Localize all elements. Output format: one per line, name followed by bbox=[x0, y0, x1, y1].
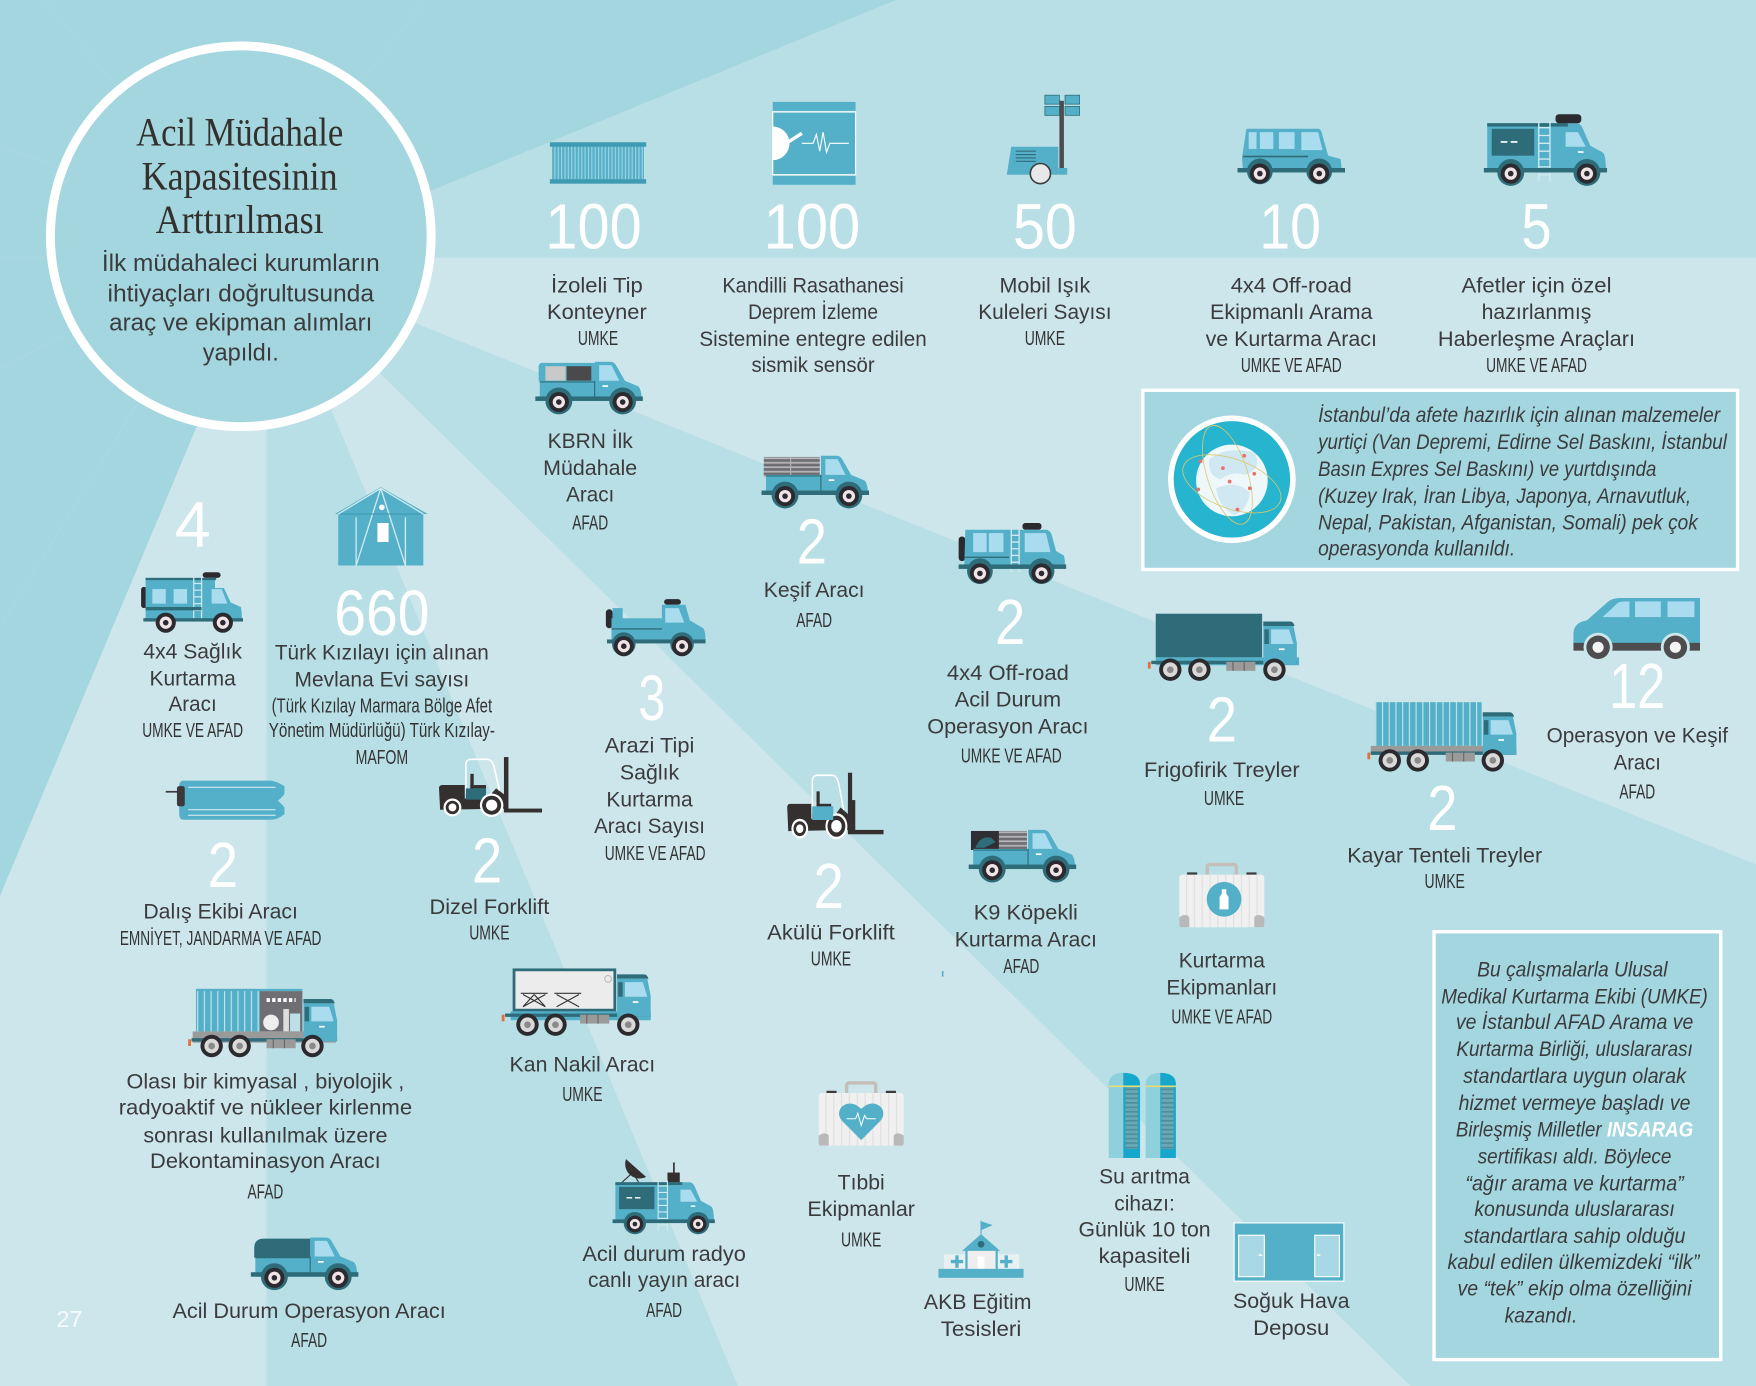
callout text: standartlara uygun olarak bbox=[1463, 1064, 1687, 1088]
number: 100 bbox=[764, 191, 860, 263]
label bbox=[1078, 1165, 1211, 1296]
label: AFAD bbox=[291, 1330, 327, 1352]
label: Aracı bbox=[169, 692, 217, 716]
label bbox=[543, 429, 637, 535]
icon: KBRN vehicle bbox=[535, 362, 643, 414]
number: 2 bbox=[472, 824, 502, 896]
heading: Kapasitesinin bbox=[142, 153, 338, 198]
icon: diesel forklift bbox=[439, 757, 542, 817]
number: 660 bbox=[334, 577, 429, 649]
label bbox=[924, 1290, 1031, 1341]
label bbox=[510, 1053, 655, 1106]
label bbox=[429, 895, 549, 945]
label: sonrası kullanılmak üzere bbox=[143, 1123, 387, 1147]
label: sismik sensör bbox=[751, 353, 875, 377]
label: Ekipmanlı Arama bbox=[1210, 300, 1373, 324]
label: Kurtarma bbox=[606, 787, 693, 811]
label: Soğuk Hava bbox=[1233, 1289, 1350, 1313]
label: ve Kurtarma Aracı bbox=[1206, 327, 1377, 351]
callout text: Birleşmiş Milletler INSARAG bbox=[1456, 1118, 1693, 1142]
item: kesif araci bbox=[762, 456, 869, 632]
label: UMKE VE AFAD bbox=[142, 720, 243, 742]
item: tibbi ekipmanlar bbox=[807, 1083, 915, 1251]
label: UMKE bbox=[1204, 788, 1244, 810]
label: UMKE VE AFAD bbox=[1486, 355, 1587, 377]
label bbox=[927, 661, 1089, 768]
label bbox=[547, 273, 647, 350]
icon: pickup with cage bbox=[762, 456, 869, 508]
label: canlı yayın aracı bbox=[588, 1268, 740, 1292]
label bbox=[978, 273, 1111, 350]
label: Arazi Tipi bbox=[605, 734, 694, 758]
label: K9 Köpekli bbox=[974, 900, 1078, 924]
label: Dizel Forklift bbox=[429, 895, 549, 919]
label bbox=[594, 734, 706, 865]
item: mobil isik kuleleri bbox=[978, 95, 1111, 350]
icon: off-road ambulance bbox=[606, 599, 706, 656]
label: Tıbbi bbox=[838, 1170, 885, 1194]
label: 4x4 Off-road bbox=[1231, 273, 1352, 297]
label: UMKE bbox=[811, 948, 851, 970]
label: Kurtarma Aracı bbox=[955, 927, 1097, 951]
icon: operation vehicle bbox=[251, 1237, 358, 1290]
label bbox=[582, 1242, 746, 1322]
label: 4x4 Sağlık bbox=[143, 640, 242, 664]
panel: title circle bbox=[50, 46, 431, 427]
callout text: (Kuzey Irak, İran Libya, Japonya, Arnavutluk, bbox=[1318, 484, 1691, 508]
icon: water purification units bbox=[1109, 1073, 1176, 1158]
label: Deprem İzleme bbox=[748, 300, 878, 324]
callout text bbox=[1316, 403, 1728, 560]
intro text bbox=[102, 250, 380, 367]
label: EMNİYET, JANDARMA VE AFAD bbox=[120, 927, 321, 950]
label: Dalış Ekibi Aracı bbox=[143, 899, 298, 923]
callout text: sertifikası aldı. Böylece bbox=[1478, 1145, 1672, 1169]
icon: light tower bbox=[1007, 95, 1080, 184]
callout text: İstanbul’da afete hazırlık için alınan malzemeler bbox=[1318, 403, 1721, 427]
intro text: yapıldı. bbox=[203, 340, 279, 367]
label bbox=[1166, 949, 1277, 1029]
intro text: İlk müdahaleci kurumların bbox=[102, 250, 380, 277]
label: Mobil Işık bbox=[1000, 273, 1091, 297]
callout text: kazandı. bbox=[1505, 1304, 1577, 1328]
label: AFAD bbox=[646, 1300, 682, 1322]
callout text: “ağır arama ve kurtarma” bbox=[1465, 1171, 1685, 1195]
label: hazırlanmış bbox=[1482, 300, 1591, 324]
callout text: kabul edilen ülkemizdeki “ilk” bbox=[1447, 1250, 1700, 1274]
label: Ekipmanları bbox=[1166, 975, 1277, 999]
label: radyoaktif ve nükleer kirlenme bbox=[119, 1095, 412, 1119]
decorative speck bbox=[942, 971, 944, 977]
label: İzoleli Tip bbox=[551, 273, 643, 297]
number: 2 bbox=[208, 829, 238, 901]
label: Aracı Sayısı bbox=[594, 814, 705, 838]
callout text: Kurtarma Birliği, uluslararası bbox=[1456, 1037, 1693, 1061]
callout text: ve İstanbul AFAD Arama ve bbox=[1456, 1010, 1693, 1034]
number: 100 bbox=[545, 191, 642, 263]
label: Frigofirik Treyler bbox=[1144, 758, 1300, 782]
label: Keşif Aracı bbox=[764, 578, 865, 602]
label: UMKE bbox=[578, 328, 618, 350]
icon: van bbox=[1573, 598, 1700, 662]
label: Acil Durum bbox=[955, 688, 1061, 712]
label: Acil durum radyo bbox=[582, 1242, 746, 1266]
label: Kan Nakil Aracı bbox=[510, 1053, 655, 1077]
label: cihazı: bbox=[1114, 1192, 1175, 1216]
label bbox=[142, 640, 243, 742]
item: sismik sensor bbox=[699, 102, 927, 377]
label: KBRN İlk bbox=[548, 429, 633, 453]
item: kan nakil araci bbox=[502, 970, 655, 1106]
item: operasyon ve kesif araci bbox=[1547, 598, 1728, 803]
number: 3 bbox=[638, 662, 665, 734]
label bbox=[764, 578, 865, 632]
icon: radio broadcast vehicle bbox=[613, 1159, 715, 1234]
intro text: ihtiyaçları doğrultusunda bbox=[108, 280, 375, 307]
label: Su arıtma bbox=[1099, 1165, 1190, 1189]
icon: seismograph bbox=[773, 102, 856, 185]
icon: 4x4 vehicle bbox=[959, 523, 1066, 584]
label: Sağlık bbox=[620, 760, 680, 784]
label bbox=[1233, 1289, 1350, 1340]
item: radyo canli yayin araci bbox=[582, 1159, 746, 1322]
label bbox=[1206, 273, 1377, 377]
heading: Acil Müdahale bbox=[136, 110, 343, 155]
number: 12 bbox=[1609, 650, 1665, 722]
label: Konteyner bbox=[547, 300, 647, 324]
label: Operasyon ve Keşif bbox=[1547, 723, 1728, 747]
label bbox=[699, 273, 927, 377]
number: 10 bbox=[1259, 191, 1321, 263]
label: Kurtarma bbox=[1179, 949, 1265, 973]
label: (Türk Kızılay Marmara Bölge Afet bbox=[272, 695, 492, 717]
label: Müdahale bbox=[543, 456, 637, 480]
label: AFAD bbox=[1619, 781, 1655, 803]
heading: Arttırılması bbox=[156, 197, 324, 242]
heading bbox=[136, 110, 343, 242]
label: Olası bir kimyasal , biyolojik , bbox=[127, 1070, 404, 1094]
intro text: araç ve ekipman alımları bbox=[109, 309, 372, 336]
callout text: konusunda uluslararası bbox=[1474, 1197, 1675, 1221]
icon: cold storage bbox=[1234, 1223, 1344, 1281]
callout text: standartlara sahip olduğu bbox=[1464, 1224, 1686, 1248]
label bbox=[955, 900, 1097, 978]
label: Aracı bbox=[566, 483, 614, 507]
callout text: Nepal, Pakistan, Afganistan, Somali) pek çok bbox=[1318, 511, 1699, 535]
item: dekontaminasyon araci bbox=[119, 989, 412, 1203]
label: Tesisleri bbox=[941, 1317, 1021, 1341]
icon: refrigerated truck bbox=[1148, 614, 1299, 681]
item: k9 kurtarma araci bbox=[955, 830, 1097, 978]
item: su aritma cihazi bbox=[1078, 1073, 1211, 1296]
callout text: Medikal Kurtarma Ekibi (UMKE) bbox=[1441, 984, 1708, 1008]
number: 2 bbox=[814, 850, 844, 922]
number: 2 bbox=[995, 586, 1025, 658]
icon: 4x4 ambulance bbox=[141, 572, 243, 633]
number: 2 bbox=[1207, 683, 1237, 755]
icon: electric forklift bbox=[787, 773, 884, 839]
label: Kandilli Rasathanesi bbox=[722, 273, 904, 297]
callout text: operasyonda kullanıldı. bbox=[1318, 536, 1515, 560]
label: Dekontaminasyon Aracı bbox=[150, 1149, 381, 1173]
item: acil durum operasyon araci bbox=[172, 1237, 446, 1352]
label: UMKE VE AFAD bbox=[1241, 355, 1342, 377]
item: 4x4 arama kurtarma bbox=[1206, 129, 1377, 377]
callout text: ve “tek” ekip olma özelliğini bbox=[1458, 1277, 1693, 1301]
callout text: Bu çalışmalarla Ulusal bbox=[1477, 958, 1669, 982]
callout text: Basın Expres Sel Baskını) ve yurtdışında bbox=[1318, 457, 1656, 481]
label bbox=[269, 641, 495, 769]
icon: dive boat bbox=[166, 781, 284, 820]
label: Akülü Forklift bbox=[767, 921, 895, 945]
number: 2 bbox=[797, 505, 827, 577]
item: akb egitim tesisleri bbox=[924, 1221, 1031, 1341]
label: Kuleleri Sayısı bbox=[978, 300, 1111, 324]
item: 4x4 acil durum operasyon bbox=[927, 523, 1089, 768]
label: UMKE bbox=[841, 1229, 881, 1251]
item: kurtarma ekipmanlari bbox=[1166, 865, 1277, 1029]
label: Mevlana Evi sayısı bbox=[295, 668, 469, 692]
item: akulu forklift bbox=[767, 773, 895, 970]
icon: equipment case bbox=[1179, 865, 1264, 927]
label: UMKE bbox=[1025, 328, 1065, 350]
label: UMKE bbox=[562, 1084, 603, 1106]
callout text bbox=[1441, 958, 1708, 1328]
label: Deposu bbox=[1253, 1316, 1329, 1340]
label: UMKE bbox=[1425, 871, 1465, 893]
label: Yönetim Müdürlüğü) Türk Kızılay- bbox=[269, 720, 495, 742]
label: AFAD bbox=[572, 513, 608, 535]
label: UMKE bbox=[1124, 1274, 1165, 1296]
label: Türk Kızılayı için alınan bbox=[275, 641, 489, 665]
panel: istanbul callout bbox=[1143, 390, 1738, 569]
label bbox=[172, 1299, 446, 1352]
label: AFAD bbox=[796, 610, 832, 632]
icon: container truck bbox=[1367, 702, 1516, 772]
label: Kayar Tenteli Treyler bbox=[1347, 843, 1542, 867]
label: 4x4 Off-road bbox=[947, 661, 1069, 685]
label: Afetler için özel bbox=[1461, 273, 1612, 297]
item: soguk hava deposu bbox=[1233, 1223, 1350, 1340]
label: UMKE VE AFAD bbox=[605, 843, 706, 865]
label: Kurtarma bbox=[150, 666, 236, 690]
number: 5 bbox=[1521, 191, 1552, 263]
label bbox=[1547, 723, 1728, 803]
icon: globe bbox=[1168, 415, 1296, 543]
callout text: hizmet vermeye başladı ve bbox=[1459, 1091, 1691, 1115]
item: dalis ekibi araci bbox=[120, 781, 321, 950]
label bbox=[119, 1070, 412, 1203]
label bbox=[1347, 843, 1542, 893]
icon: medical case bbox=[819, 1083, 904, 1146]
icon: container bbox=[550, 142, 646, 184]
label: Aracı bbox=[1614, 750, 1661, 774]
icon: blood transfer truck bbox=[502, 970, 651, 1036]
label: UMKE VE AFAD bbox=[1171, 1007, 1272, 1029]
label: UMKE VE AFAD bbox=[961, 746, 1062, 768]
number: 50 bbox=[1013, 191, 1077, 263]
item: KBRN bbox=[535, 362, 643, 535]
icon: decontamination truck bbox=[188, 989, 337, 1057]
label: kapasiteli bbox=[1099, 1244, 1190, 1268]
item: mevlana evi bbox=[269, 487, 495, 769]
icon: K9 vehicle bbox=[969, 830, 1076, 882]
page number: 27 bbox=[56, 1306, 83, 1332]
label: UMKE bbox=[469, 923, 510, 945]
label: Operasyon Aracı bbox=[927, 715, 1089, 739]
icon: comms vehicle bbox=[1484, 114, 1607, 186]
label bbox=[1438, 273, 1635, 377]
item: frigofirik treyler bbox=[1144, 614, 1300, 810]
label: Sistemine entegre edilen bbox=[699, 327, 927, 351]
number: 4 bbox=[175, 489, 211, 561]
label bbox=[1144, 758, 1300, 810]
label: AFAD bbox=[1003, 956, 1039, 978]
label: Günlük 10 ton bbox=[1078, 1217, 1211, 1241]
icon: minibus bbox=[1237, 129, 1345, 184]
number: 2 bbox=[1427, 772, 1458, 844]
item: kayar tenteli treyler bbox=[1347, 702, 1542, 893]
label: AFAD bbox=[247, 1181, 283, 1203]
label bbox=[767, 921, 895, 970]
icon: tent house bbox=[335, 487, 428, 566]
label: Haberleşme Araçları bbox=[1438, 327, 1635, 351]
item: izoleli tip konteyner bbox=[545, 142, 647, 350]
item: dizel forklift bbox=[429, 757, 549, 945]
label: MAFOM bbox=[356, 747, 408, 769]
label: Acil Durum Operasyon Aracı bbox=[172, 1299, 446, 1323]
label: Ekipmanlar bbox=[807, 1197, 915, 1221]
icon: training building bbox=[938, 1221, 1024, 1278]
item: haberlesme araclari bbox=[1438, 114, 1635, 377]
label bbox=[807, 1170, 915, 1251]
item: 4x4 saglik kurtarma bbox=[141, 489, 243, 742]
item: arazi tipi saglik kurtarma bbox=[594, 599, 706, 865]
panel: INSARAG callout bbox=[1434, 932, 1721, 1360]
label: AKB Eğitim bbox=[924, 1290, 1031, 1314]
label bbox=[120, 899, 321, 950]
